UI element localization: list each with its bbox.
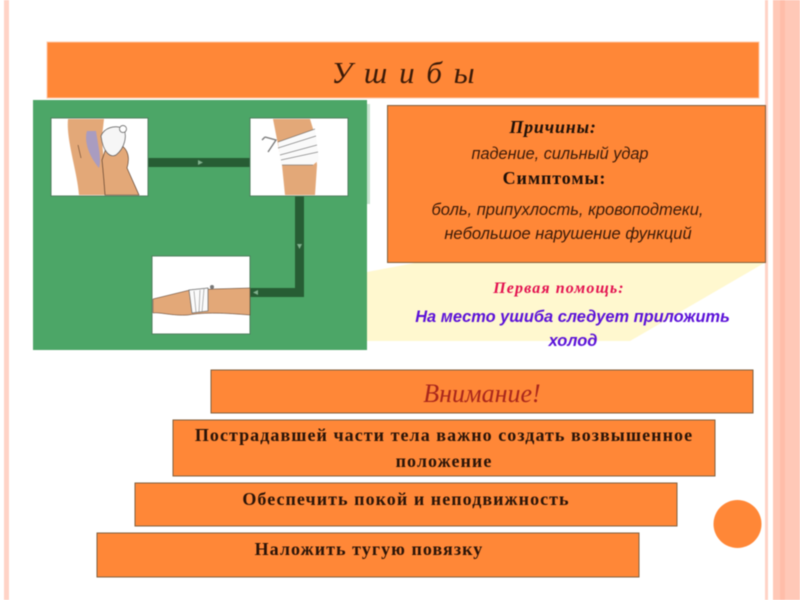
step: raised position	[173, 420, 715, 476]
step: tight bandage	[97, 533, 639, 577]
text: symptoms: боль, припухлость, кровоподтеки,	[431, 201, 704, 219]
icon: bandaged knee	[152, 256, 250, 334]
step: rest and immobility: Обеспечить покой и неподвижность	[242, 489, 570, 509]
step: tight bandage: Наложить тугую повязку	[255, 539, 483, 559]
step: raised position: положение	[396, 451, 492, 471]
decorative circle	[714, 500, 762, 548]
heading: symptoms: Симптомы:	[503, 168, 606, 188]
text: causes: падение, сильный удар	[472, 145, 648, 163]
icon: cold compress on bruised leg	[51, 118, 148, 196]
panel: first aid diagram	[33, 100, 370, 350]
arrow: step one to step two	[148, 158, 250, 167]
icon: bandaged thigh	[250, 118, 348, 196]
heading: causes: Причины:	[508, 117, 597, 137]
banner: attention	[211, 370, 753, 413]
step: raised position: Пострадавшей части тела важно создать возвышенное	[195, 425, 693, 445]
text: symptoms: небольшое нарушение функций	[444, 225, 692, 243]
panel: causes and symptoms	[388, 106, 766, 262]
arrow: step two to step three	[250, 196, 304, 297]
text: first aid instruction: холод	[548, 332, 597, 350]
banner: attention: Внимание!	[423, 379, 541, 408]
heading: first aid: Первая помощь:	[492, 280, 625, 297]
step: rest and immobility	[135, 483, 677, 526]
title banner: У ш и б ы	[331, 55, 477, 90]
title banner	[47, 42, 759, 98]
text: first aid instruction: На место ушиба следует приложить	[415, 308, 730, 326]
background yellow shape	[367, 262, 766, 341]
